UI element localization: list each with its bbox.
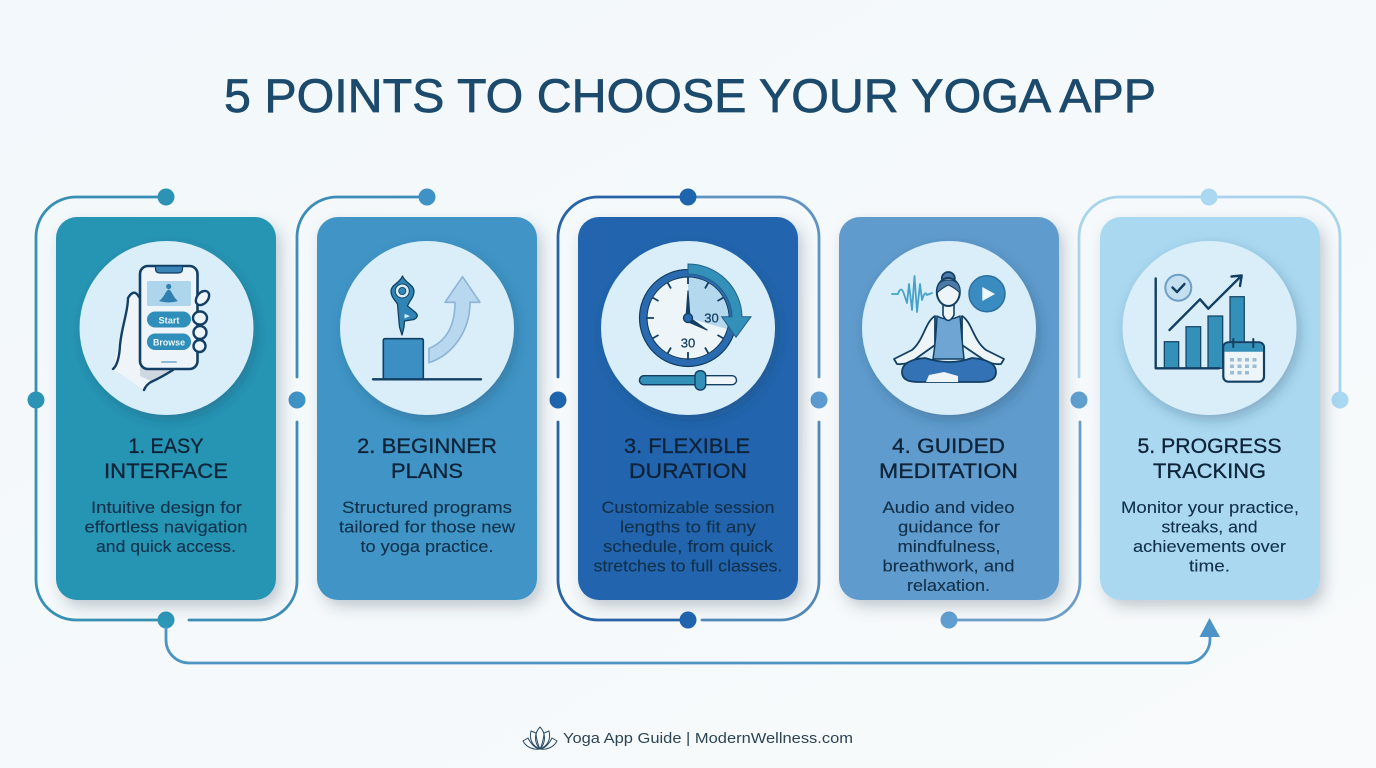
text: guided meditation description: relaxation. [907,576,990,595]
text: flexible duration description: schedule, from quick [603,537,774,556]
icon: bar chart with calendar [1156,275,1264,382]
connector: around card 5 [1200,188,1348,408]
text: beginner plans description: Structured programs [342,498,512,517]
panel: beginner plans [317,217,537,600]
text: guided meditation description: mindfulness, [898,537,1000,556]
heading: flexible duration: DURATION [629,460,747,483]
panel: easy interface [56,217,276,600]
icon: hand holding phone: Browse [153,338,185,348]
text: beginner plans description: to yoga practice. [360,537,494,556]
heading: guided meditation: MEDITATION [879,460,1018,483]
text: beginner plans description [339,498,516,556]
connector: around card 1 [28,188,174,628]
heading: easy interface [104,435,228,483]
connector: around card 4 [940,197,1340,628]
icon: hand holding phone [113,266,212,390]
text: easy interface description: effortless navigation [84,518,248,536]
text: progress tracking description: streaks, and [1162,518,1258,536]
icon: meditating person with audio and play button [892,272,1005,382]
heading: flexible duration [624,435,750,483]
text: beginner plans description: tailored for those new [339,518,516,536]
text: easy interface description: Intuitive design for [91,498,242,517]
text: guided meditation description: guidance for [898,518,1000,536]
footer text: Yoga App Guide | ModernWellness.com [563,730,853,747]
title: 5 POINTS TO CHOOSE YOUR YOGA APP [224,70,1156,123]
text: progress tracking description: time. [1189,556,1230,576]
heading: guided meditation: 4. GUIDED [892,435,1005,458]
text: easy interface description [84,498,248,556]
heading: beginner plans [357,435,497,483]
heading: progress tracking [1138,435,1282,483]
icon: clock with slider [640,264,751,390]
heading: beginner plans: 2. BEGINNER [357,435,497,458]
text: flexible duration description: stretches to full classes. [594,556,782,576]
text: easy interface description: and quick access. [96,537,236,556]
text: flexible duration description [594,498,782,576]
text: flexible duration description: lengths to fit any [620,518,757,536]
text: progress tracking description: Monitor your practice, [1121,498,1299,517]
heading: progress tracking: 5. PROGRESS [1138,435,1282,458]
heading: easy interface: INTERFACE [104,460,228,483]
icon: yoga pose on step with rising arrow [373,276,481,379]
heading: guided meditation [879,435,1018,483]
text: progress tracking description: achievements over [1133,537,1286,556]
arrow: card 1 to card 5 [166,618,1220,663]
text: guided meditation description: Audio and video [882,498,1014,517]
connector: around card 3 [550,188,828,628]
heading: flexible duration: 3. FLEXIBLE [624,435,750,458]
text: guided meditation description [882,498,1014,595]
panel: flexible duration [578,217,798,600]
panel: progress tracking [1100,217,1320,600]
icon: clock with slider: 30 [704,310,719,326]
text: flexible duration description: Customizable session [602,498,774,517]
text: progress tracking description [1121,498,1299,576]
icon: clock with slider: 30 [681,336,695,350]
heading: easy interface: 1. EASY [128,435,204,458]
panel: guided meditation [839,217,1059,600]
icon: lotus [523,727,557,749]
connector: around card 2 [189,188,436,620]
text: guided meditation description: breathwork, and [882,556,1014,576]
heading: beginner plans: PLANS [391,460,463,483]
icon: hand holding phone: Start [158,316,180,326]
heading: progress tracking: TRACKING [1153,460,1266,483]
